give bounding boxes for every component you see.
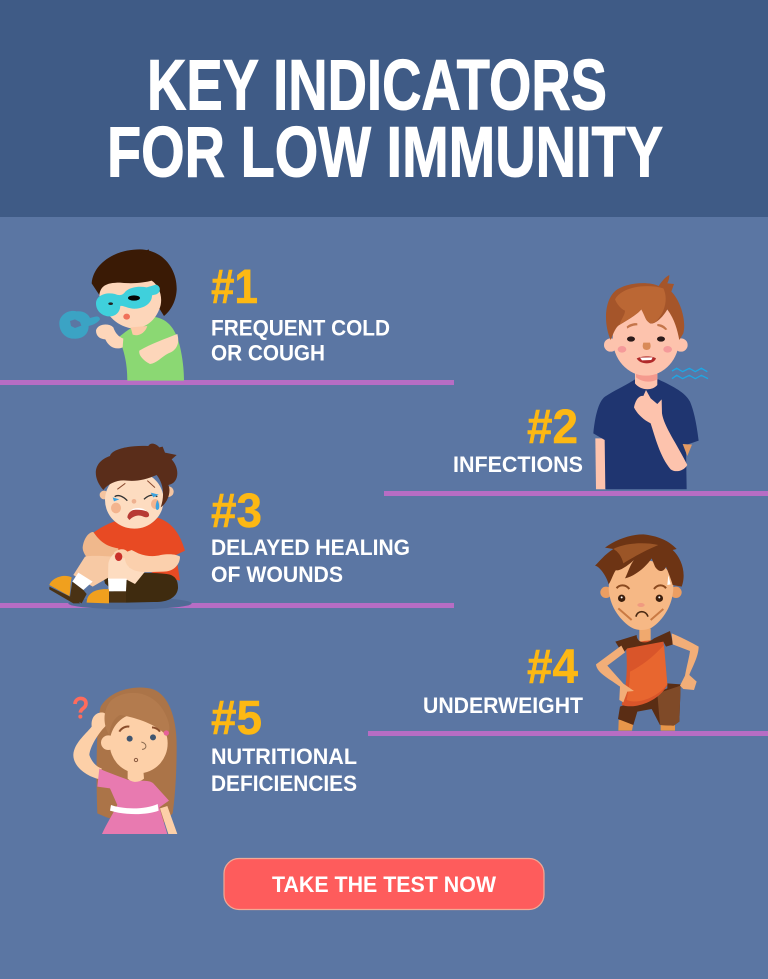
item 1 text — [211, 261, 390, 366]
header banner — [0, 0, 768, 217]
icon: boy with sore throat in navy shirt — [593, 275, 708, 489]
title — [107, 46, 663, 192]
title: KEY INDICATORS — [147, 46, 607, 126]
icon: coughing boy with green shirt — [59, 249, 184, 381]
item 1 text: #1 — [211, 261, 258, 314]
icon: crying boy with wounded knee — [49, 444, 192, 609]
item 5 text: NUTRITIONAL — [211, 744, 357, 769]
item 2 text: INFECTIONS — [453, 452, 583, 477]
item 1 text: OR COUGH — [211, 340, 325, 366]
item 2 text — [453, 401, 583, 477]
item 3 text: DELAYED HEALING — [211, 535, 410, 560]
icon: underweight boy holding loose shorts — [595, 534, 699, 731]
item 3 text — [211, 485, 410, 587]
icon: confused girl with long hair — [73, 687, 177, 834]
item 4 text — [423, 641, 584, 718]
item 5 text: DEFICIENCIES — [211, 771, 357, 796]
item 5 text — [211, 692, 357, 796]
item 3 text: OF WOUNDS — [211, 562, 343, 587]
divider shelf 3 — [0, 603, 454, 608]
item 5 text: #5 — [211, 692, 262, 745]
item 4 text: #4 — [527, 641, 578, 694]
divider shelf 2 — [384, 491, 768, 496]
button: take the test now: TAKE THE TEST NOW — [272, 872, 496, 897]
item 4 text: UNDERWEIGHT — [423, 693, 584, 718]
item 1 text: FREQUENT COLD — [211, 316, 390, 340]
button: take the test now — [224, 858, 544, 910]
divider shelf 1 — [0, 380, 454, 385]
item 3 text: #3 — [211, 485, 262, 538]
item 2 text: #2 — [527, 401, 578, 454]
divider shelf 4 — [368, 731, 768, 736]
